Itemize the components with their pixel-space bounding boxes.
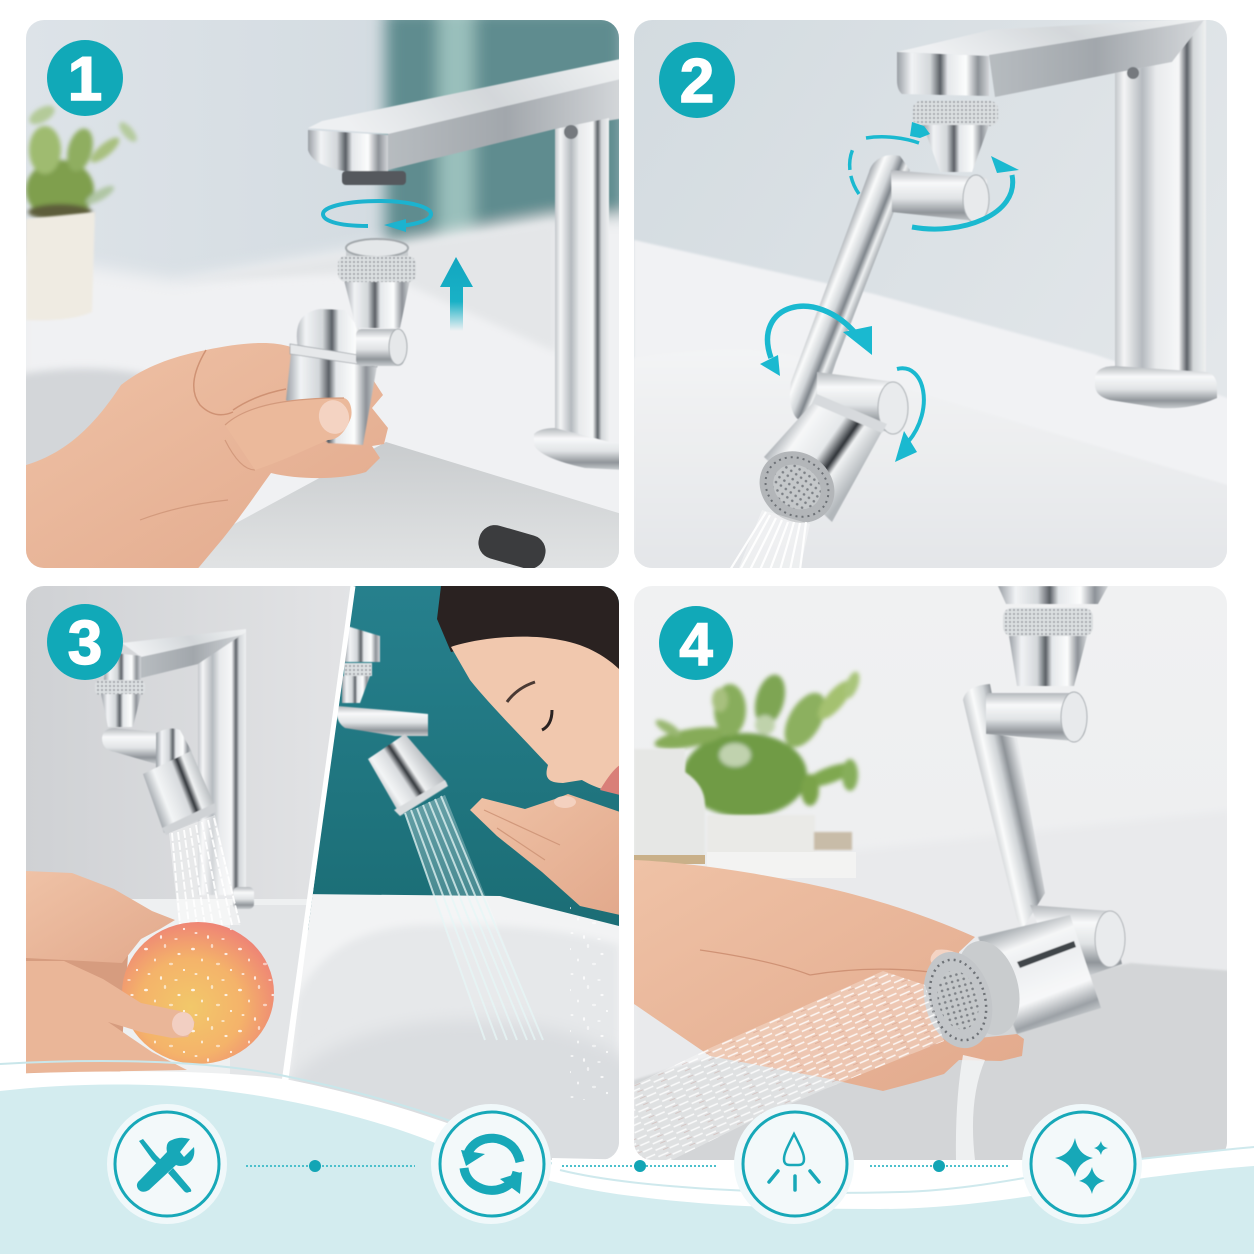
icon: rotation arrows	[431, 1104, 551, 1224]
upper hand	[26, 871, 175, 963]
faucet	[308, 58, 625, 470]
swivel arm and head	[963, 586, 1125, 1034]
rotation arrows	[760, 122, 1019, 462]
faucet and adjustable head	[337, 626, 448, 816]
splashing water	[570, 905, 615, 1100]
connector 1	[246, 1160, 415, 1172]
icon: water drop	[734, 1104, 854, 1224]
bathroom backdrop	[15, 10, 640, 580]
overflow slot	[478, 525, 546, 568]
room backdrop	[634, 586, 1234, 1165]
connector 2	[562, 1160, 718, 1172]
faucet	[95, 629, 254, 909]
icon: wrench and screwdriver	[107, 1104, 227, 1224]
aerator face and mesh	[760, 451, 834, 523]
bathroom backdrop	[634, 20, 1234, 580]
icon: sparkles	[1022, 1104, 1142, 1224]
hand behind aerator	[20, 343, 388, 572]
aerator part	[286, 239, 416, 445]
lower hand	[26, 961, 195, 1073]
wall and counter	[26, 586, 356, 1100]
peach under water	[122, 922, 274, 1064]
step number 3: 3	[68, 609, 102, 678]
woman's face	[451, 637, 620, 795]
arrow: rotate to screw on	[323, 201, 431, 232]
falling water	[956, 1055, 985, 1160]
woman's hair	[437, 586, 619, 672]
step number 4	[659, 606, 733, 680]
panel 2: rotating the arm	[634, 18, 1234, 580]
panel 1: attach the aerator to the tap	[15, 10, 640, 580]
panel 4: aerator angled over the hand	[634, 586, 1234, 1165]
water stream	[730, 510, 810, 570]
water jet	[634, 971, 944, 1160]
blurred plant, pot and bottle	[634, 670, 862, 878]
step number 1: 1	[68, 45, 102, 114]
shaded palm between hands	[26, 956, 128, 1074]
white divider between scenes	[283, 586, 353, 1090]
white base	[0, 1071, 1254, 1254]
faucet	[897, 18, 1217, 408]
step number 2	[659, 42, 735, 118]
cupped hands	[470, 794, 620, 915]
step number 4: 4	[679, 611, 713, 678]
white swoosh to right	[552, 1147, 1254, 1215]
right scene: washing face	[288, 586, 619, 1160]
step number 3	[47, 604, 123, 680]
step number 1	[47, 40, 123, 116]
water stream	[169, 815, 240, 925]
soft highlight stroke	[560, 1147, 1254, 1193]
panel 3: rinsing fruit and washing face	[26, 586, 619, 1160]
thin glass line	[0, 1061, 555, 1165]
thumb holding aerator	[225, 397, 353, 470]
bottom wave band	[0, 1061, 1254, 1254]
aerator nozzle and mesh	[913, 934, 1029, 1056]
connector 3	[870, 1160, 1008, 1172]
pale teal wave	[0, 1084, 1254, 1254]
blurred plant and pot	[26, 102, 140, 320]
hand under the stream	[634, 860, 1024, 1091]
sink basin	[288, 894, 619, 1160]
adjustable aerator arm	[764, 101, 998, 522]
water stream	[405, 795, 543, 1040]
arrow: move upward	[440, 257, 473, 331]
step number 2: 2	[680, 47, 714, 116]
left scene: washing fruit	[26, 586, 356, 1100]
teal wall	[300, 586, 620, 931]
